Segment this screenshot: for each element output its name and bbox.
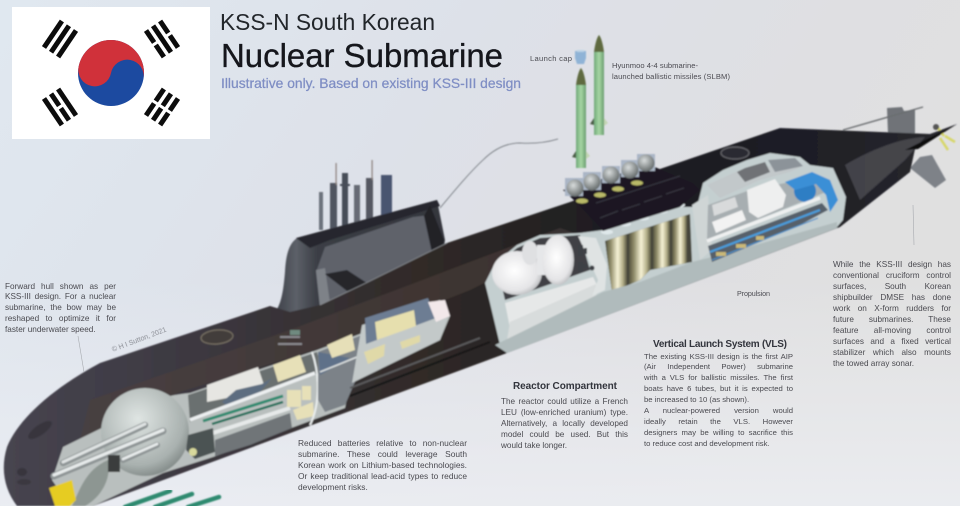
lower bay: [186, 428, 215, 459]
reactor body text: Alternatively, a locally developed: [501, 418, 628, 428]
cutaway forward section: [49, 298, 450, 506]
bulkhead frame with ports: [578, 236, 607, 296]
trigram top right: [144, 20, 180, 58]
submarine cutaway illustration: [4, 107, 957, 506]
reactor body text: would take longer.: [501, 440, 567, 450]
trigram top left: [42, 20, 78, 58]
control surfaces note: future submarines. These: [833, 314, 951, 324]
forward hull note: submarine, the bow may be: [5, 303, 116, 312]
launch cap icon: [575, 50, 586, 64]
control surfaces note: surfaces and a fixed vertical: [833, 336, 951, 346]
VLS body text: A nuclear-powered version would: [644, 406, 793, 415]
VLS hatches: [565, 154, 655, 204]
yellow sonar: [49, 480, 76, 506]
reactor body text: [501, 396, 628, 450]
battery deck: [215, 413, 292, 456]
upper dome interior: [707, 158, 803, 198]
VLS body text: be increased to 10 (as shown).: [644, 395, 749, 404]
propulsion compartment: [692, 158, 838, 262]
hull hatch aft: [721, 147, 749, 159]
reactor deck: [505, 277, 598, 328]
sail: [268, 160, 445, 320]
launch cap label: Launch cap: [530, 54, 572, 63]
leader lines: [78, 205, 914, 372]
taegeuk symbol: [72, 34, 150, 112]
trigram bottom right: [144, 88, 180, 126]
batteries note: submarine. These could leverage South: [298, 448, 467, 458]
propeller: [933, 124, 955, 150]
forward hull note: reshaped to optimize it for: [5, 314, 116, 323]
torpedo room back wall: [188, 352, 322, 422]
sail side panel: [316, 215, 438, 308]
missile label: Hyunmoo 4-4 submarine-: [612, 61, 698, 70]
control surfaces note: surfaces, South Korean: [833, 282, 951, 290]
masts: [319, 160, 392, 239]
batteries note: Korean work on Lithium-based technologies.: [298, 460, 467, 470]
mid compartment: [318, 335, 362, 412]
VLS body text: boats have 6 tubes, but it is expected to: [644, 384, 793, 393]
reactor dark back: [497, 235, 590, 300]
batteries note: [298, 438, 467, 492]
reactor white domes: [492, 251, 542, 295]
SLBM missile right: [590, 35, 608, 135]
propulsion deck: [707, 198, 820, 241]
cream boxes forward: [273, 355, 314, 420]
VLS heading: Vertical Launch System (VLS): [653, 339, 787, 350]
batteries note: development risks.: [298, 482, 368, 492]
thin wire from sail: [440, 139, 558, 208]
reactor body text: The reactor could utilize a French: [501, 396, 628, 406]
trigram bottom left: [42, 88, 78, 126]
forward hull note: [5, 282, 116, 334]
black tail tip: [905, 124, 957, 150]
wire along hull: [320, 243, 447, 305]
torpedo tubes: [54, 424, 163, 476]
dark pressure hull between sections: [350, 338, 490, 396]
control surfaces note: [833, 260, 951, 368]
deck band: [190, 373, 315, 420]
control surfaces note: the towed array sonar.: [833, 358, 914, 368]
second deck band: [213, 408, 290, 433]
copyright credit: © H I Sutton, 2021: [111, 326, 168, 354]
title block: [220, 9, 521, 91]
batteries note: Or keep traditional lead-acid types to reduce: [298, 470, 467, 480]
white machinery block: [747, 179, 786, 218]
control surfaces note: feature all-moving control: [833, 326, 951, 334]
reactor floor vent: [540, 322, 565, 336]
aft compartment of forward cut: [352, 300, 447, 383]
bow marks: [17, 418, 54, 485]
sail plane: [325, 270, 370, 291]
reactor body text: LEU (low-enriched uranium) type.: [501, 408, 628, 416]
flag of South Korea: [12, 7, 210, 139]
hull number marking: [278, 330, 302, 345]
title line one: KSS-N South Korean: [220, 9, 435, 35]
hull hatch forward: [200, 329, 234, 345]
VLS body text: ideally retain the VLS. However: [644, 417, 793, 426]
VLS body text: to reduce cost and development risk.: [644, 439, 770, 448]
VLS body text: The existing KSS-III design is the first AIP: [644, 352, 793, 360]
VLS lower shell: [495, 222, 837, 353]
torpedoes below hull: [125, 491, 219, 506]
blue motor: [785, 172, 838, 212]
VLS body text: designers may be willing to sacrifice this: [644, 428, 793, 437]
reactor heading: Reactor Compartment: [513, 381, 618, 392]
forward hull note: faster underwater speed.: [5, 325, 96, 334]
lower equipment with blue pipes: [708, 203, 828, 262]
pressure bulkhead sphere: [101, 388, 189, 476]
forward hull note: KSS-III design. For a nuclear: [5, 292, 116, 301]
VLS body text: with a VLS for ballistic missiles. The first: [644, 373, 793, 382]
subtitle: Illustrative only. Based on existing KSS-III design: [221, 75, 521, 91]
VLS body text: (Air Independent Power) submarine: [644, 362, 793, 371]
control surfaces note: work on X-form rudders for: [833, 304, 951, 312]
cream boxes mid: [327, 334, 355, 358]
green torpedo rods: [203, 396, 283, 424]
reactor body text: model could be used. But this: [501, 430, 628, 438]
torpedo grid: [108, 455, 120, 472]
missile label: [612, 61, 730, 81]
cream boxes aft: [375, 310, 416, 340]
VLS upper rings: [601, 202, 685, 234]
control surfaces note: While the KSS-III design has: [833, 260, 951, 268]
control surfaces note: conventional cruciform control: [833, 270, 951, 280]
cutaway reactor and aft section: [485, 153, 846, 353]
lower bow shell: [72, 460, 109, 506]
generator cylinders: [712, 197, 746, 233]
tail sheen: [845, 137, 925, 200]
title line two: Nuclear Submarine: [221, 38, 503, 75]
forward hull note: Forward hull shown as per: [5, 282, 116, 290]
brown hull stripe: [80, 228, 580, 440]
white compartments: [207, 367, 264, 402]
propulsion label: Propulsion: [737, 289, 770, 298]
rudder lower: [910, 155, 946, 188]
reactor compartment: [492, 235, 607, 345]
rudder upper: [843, 107, 923, 134]
batteries note: Reduced batteries relative to non-nuclear: [298, 438, 467, 448]
interior wall: [707, 176, 826, 240]
control surfaces note: shipbuilder DMSE has done: [833, 292, 951, 302]
SLBM missile left: [572, 68, 590, 168]
propulsion bulkhead: [692, 195, 712, 260]
control surfaces note: stabilizer which also mounts: [833, 348, 951, 356]
missile label: launched ballistic missiles (SLBM): [612, 72, 730, 81]
VLS deck: [563, 165, 700, 231]
bulkhead ring: [310, 352, 318, 425]
VLS missile tubes: [495, 202, 837, 353]
VLS body text: [644, 352, 793, 448]
hull: [4, 124, 957, 506]
